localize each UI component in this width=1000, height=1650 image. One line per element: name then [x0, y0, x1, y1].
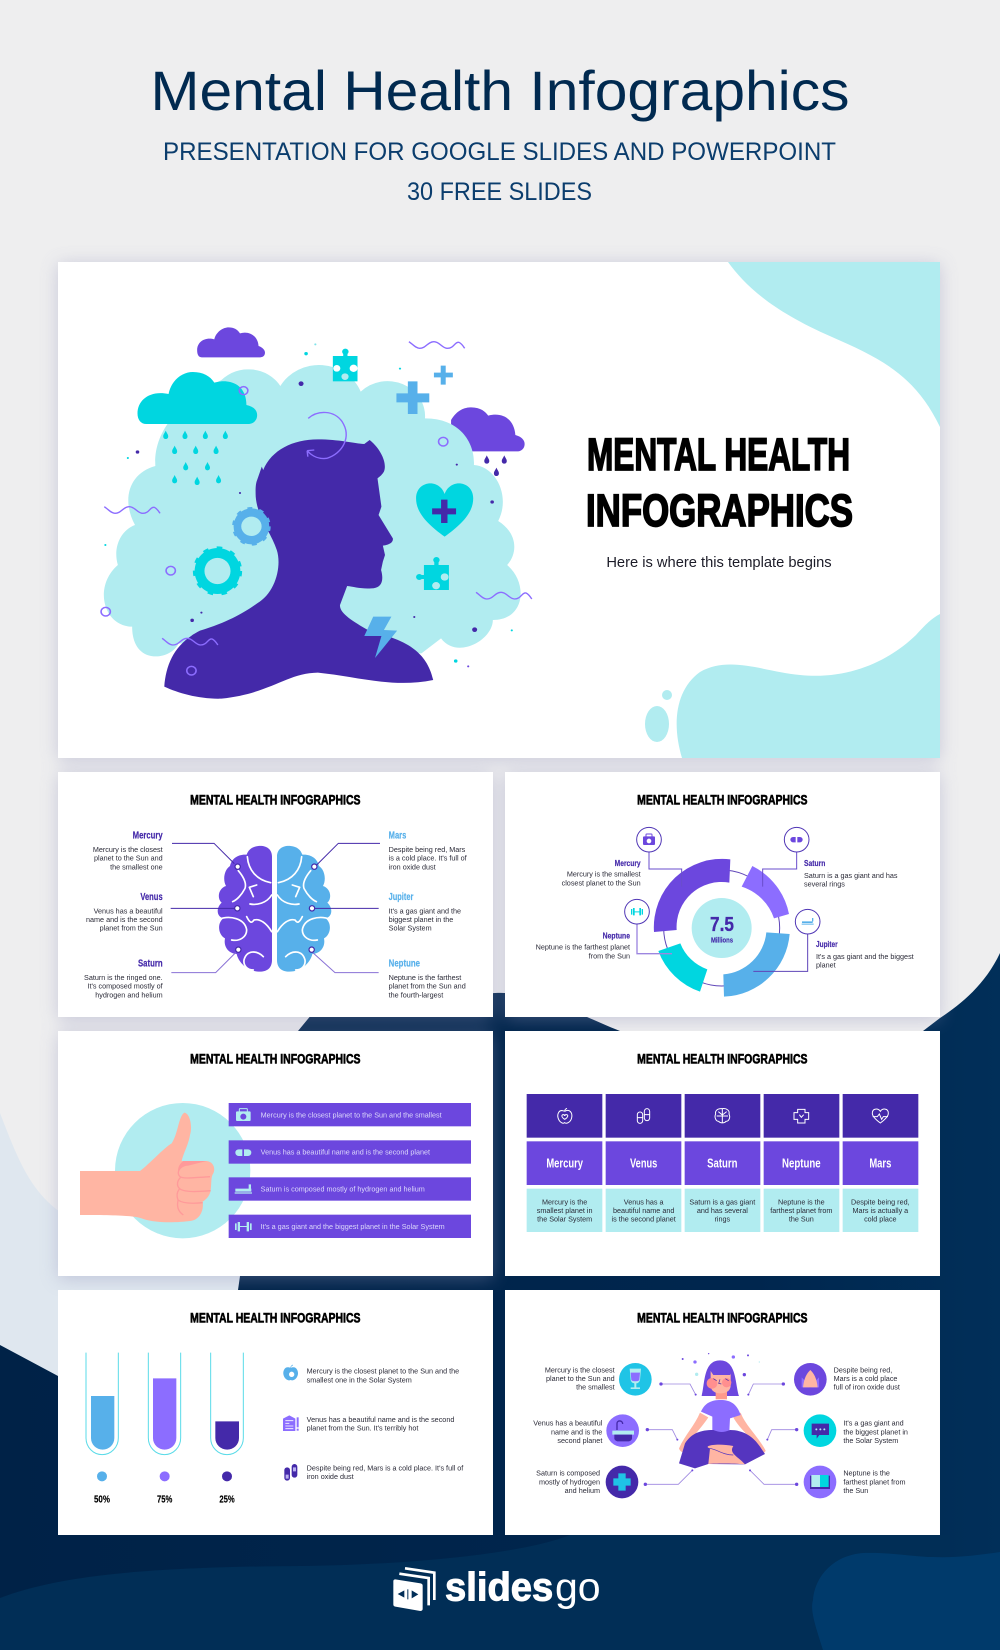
descriptions: Neptune is the — [778, 1197, 825, 1206]
bar 2 — [229, 1140, 471, 1164]
descriptions: Venus has a — [624, 1197, 665, 1206]
text: neptune — [536, 931, 630, 960]
text 1 — [307, 1367, 459, 1384]
descriptions: smallest planet in — [537, 1206, 593, 1215]
cover title — [586, 429, 853, 536]
text: mars — [389, 831, 468, 871]
text: neptune: planet from the Sun and — [389, 982, 466, 991]
dots dark — [136, 381, 494, 667]
text: bathtub: Venus has a beautiful — [533, 1419, 603, 1428]
centre value — [692, 898, 752, 958]
panel: thumbs up slide — [58, 1031, 493, 1276]
text: jupiter: Jupiter — [389, 892, 414, 903]
text: venus — [86, 892, 163, 933]
logo: slidesgo — [393, 1566, 601, 1611]
corner blob top right — [728, 262, 940, 427]
text: neptune: Neptune — [603, 931, 630, 941]
percent labels: 75% — [157, 1494, 173, 1505]
text: saturn: It's composed mostly of — [87, 982, 164, 991]
descriptions: the Sun — [789, 1215, 814, 1224]
text 2: Venus has a beautiful name and is the second — [307, 1415, 454, 1424]
text: glass: Mercury is the closest — [545, 1365, 615, 1374]
bar 3 — [229, 1177, 471, 1201]
text: bubble: the biggest planet in — [843, 1427, 908, 1436]
text: bubble: the Solar System — [843, 1436, 898, 1445]
donut chart — [654, 859, 790, 997]
icon: small plus — [434, 366, 453, 385]
subtitle line 2: 30 FREE SLIDES — [407, 178, 592, 206]
person silhouette — [164, 439, 433, 699]
connectors — [645, 1384, 797, 1484]
text: saturn: hydrogen and helium — [95, 990, 163, 999]
text: mercury: the smallest one — [110, 862, 163, 871]
icon: dumbbell — [235, 1222, 252, 1231]
raindrops — [163, 431, 228, 485]
icon: bathtub — [606, 1414, 639, 1447]
text: plus — [536, 1469, 600, 1495]
icon: apple — [283, 1365, 298, 1380]
text: neptune — [389, 959, 466, 999]
icon: pill — [784, 827, 809, 852]
icon: card deck — [393, 1568, 434, 1611]
text: mars: is a cold place. It's full of — [389, 854, 468, 863]
raindrops right — [484, 455, 507, 476]
bar 4 — [229, 1215, 471, 1238]
icon: bed — [795, 909, 820, 934]
text: plus: and helium — [565, 1486, 600, 1495]
connector dots — [235, 864, 317, 952]
text 3 — [307, 1463, 464, 1481]
text: neptune: Neptune — [389, 959, 421, 970]
corner blob bottom right — [677, 614, 940, 758]
text: mars: Despite being red, Mars — [389, 845, 466, 854]
icon: praying hands — [794, 1363, 827, 1396]
text: glass — [545, 1365, 615, 1392]
icon: teal gear — [194, 547, 241, 595]
descriptions: cold place — [864, 1215, 897, 1224]
descriptions: is the second planet — [612, 1215, 676, 1224]
text: bathtub — [533, 1419, 603, 1445]
text: mercury — [93, 831, 163, 871]
icon: bed — [235, 1184, 252, 1194]
heading: MENTAL HEALTH INFOGRAPHICS — [637, 1052, 807, 1067]
percent labels: 50% — [94, 1494, 110, 1505]
heading: MENTAL HEALTH INFOGRAPHICS — [637, 1311, 807, 1326]
text: hands: Mars is a cold place — [834, 1374, 897, 1383]
brain — [218, 846, 331, 972]
panel: brain slide — [58, 772, 493, 1017]
percent labels — [94, 1494, 235, 1505]
rings — [101, 387, 448, 675]
icon: heart — [416, 483, 473, 537]
text: glass: planet to the Sun and — [546, 1374, 615, 1383]
blob dot — [662, 690, 672, 700]
text: bubble — [843, 1419, 908, 1445]
text: jupiter — [816, 939, 914, 970]
heading: MENTAL HEALTH INFOGRAPHICS — [190, 1311, 360, 1326]
names: Venus — [630, 1156, 657, 1170]
descriptions: beautiful name and — [613, 1206, 674, 1215]
descriptions: Despite being red, — [851, 1197, 910, 1206]
text: jupiter: Solar System — [389, 924, 432, 933]
text 1: Mercury is the closest planet to the Sun and the — [307, 1367, 459, 1376]
text: book: the Sun — [843, 1486, 868, 1495]
icon: big plus — [396, 381, 429, 414]
circle backdrop — [115, 1103, 250, 1238]
text: venus: Venus — [140, 892, 163, 903]
text: mercury: planet to the Sun and — [94, 854, 163, 863]
text: saturn — [804, 858, 898, 889]
bar 1: Mercury is the closest planet to the Sun and the smallest — [261, 1110, 442, 1119]
names — [546, 1156, 891, 1170]
heading: MENTAL HEALTH INFOGRAPHICS — [190, 1052, 360, 1067]
legend dots — [97, 1471, 232, 1481]
icon: dumbbell — [625, 899, 649, 924]
text: venus: name and is the second — [86, 915, 163, 924]
tube 25% — [211, 1353, 243, 1455]
descriptions — [537, 1197, 910, 1224]
text 1: smallest one in the Solar System — [307, 1375, 412, 1384]
icon: circular arrow — [307, 412, 346, 459]
text: jupiter: Jupiter — [816, 939, 838, 949]
cover title: MENTAL HEALTH — [587, 429, 850, 480]
descriptions: the Solar System — [537, 1215, 592, 1224]
text: saturn: Saturn is the ringed one. — [84, 973, 163, 982]
tube 50% — [86, 1353, 118, 1455]
descriptions: and has several — [697, 1206, 748, 1215]
bar 3: Saturn is composed mostly of hydrogen and helium — [261, 1185, 425, 1194]
text: plus: Saturn is composed — [536, 1469, 600, 1478]
cover subtitle: Here is where this template begins — [606, 555, 832, 571]
text: saturn: Saturn — [804, 858, 825, 868]
subtitle: PRESENTATION FOR GOOGLE SLIDES AND POWERPOINT — [163, 138, 836, 166]
descriptions: Mars is actually a — [852, 1206, 909, 1215]
cover title: INFOGRAPHICS — [586, 485, 853, 536]
text: mercury — [562, 858, 641, 887]
text: venus: planet from the Sun — [100, 924, 163, 933]
icon: teal rain cloud — [137, 372, 257, 424]
panel: meditation slide — [505, 1290, 940, 1535]
text: mercury: Mercury is the closest — [93, 845, 163, 854]
connector lines — [637, 852, 808, 971]
icon: pills — [284, 1464, 297, 1481]
outline icons — [558, 1108, 888, 1123]
slide shadows — [58, 264, 940, 1279]
text: jupiter: It's a gas giant and the — [389, 906, 461, 915]
icon: plus — [606, 1466, 638, 1498]
text 3: Despite being red, Mars is a cold place. It's full of — [307, 1463, 464, 1472]
names row — [527, 1141, 918, 1185]
icon: medkit — [637, 827, 661, 852]
text: mercury: Mercury is the smallest — [567, 870, 641, 879]
icon: notes — [283, 1415, 299, 1431]
names: Saturn — [707, 1156, 737, 1170]
icon: glass — [619, 1363, 652, 1396]
centre value: 7.5 — [710, 913, 734, 936]
icon: purple cloud right — [451, 407, 525, 451]
hand — [80, 1113, 214, 1222]
panel: cover slide — [58, 262, 940, 758]
names: Mars — [869, 1156, 891, 1170]
descriptions: Mercury is the — [542, 1197, 587, 1206]
text: book: Neptune is the — [843, 1469, 890, 1478]
icon row — [527, 1094, 918, 1138]
text: mars: Mars — [389, 831, 406, 842]
descriptions: Saturn is a gas giant — [689, 1197, 755, 1206]
main title: Mental Health Infographics — [150, 59, 850, 122]
descriptions: farthest planet from — [770, 1206, 832, 1215]
icon: pill — [235, 1149, 251, 1156]
text: saturn: Saturn is a gas giant and has — [804, 871, 898, 880]
text: saturn — [84, 959, 164, 999]
description row — [527, 1189, 918, 1232]
text: neptune: the fourth-largest — [389, 990, 443, 999]
panel: donut slide — [505, 772, 940, 1017]
bar 4: It's a gas giant and the biggest planet in the Solar System — [261, 1222, 445, 1231]
icon: puzzle lower — [416, 557, 449, 590]
text: glass: the smallest — [576, 1383, 615, 1392]
descriptions: rings — [715, 1215, 731, 1224]
icon: puzzle top — [333, 349, 357, 381]
text: bubble: It's a gas giant and — [843, 1419, 904, 1428]
icon: speech bubble — [804, 1414, 836, 1447]
text: jupiter: It's a gas giant and the biggest — [816, 952, 914, 961]
bar 1 — [229, 1103, 471, 1126]
names: Neptune — [782, 1156, 821, 1170]
text: jupiter: biggest planet in the — [389, 915, 453, 924]
bar 2: Venus has a beautiful name and is the second planet — [261, 1148, 430, 1157]
text: mercury: Mercury — [615, 858, 641, 868]
text: mars: iron oxide dust — [389, 862, 436, 871]
text: neptune: from the Sun — [589, 951, 630, 960]
panel: table slide — [505, 1031, 940, 1276]
text 3: iron oxide dust — [307, 1472, 354, 1481]
text: hands: full of iron oxide dust — [834, 1383, 900, 1392]
icon: medkit — [236, 1109, 251, 1121]
icon: lightning bolt — [364, 617, 397, 658]
heading: MENTAL HEALTH INFOGRAPHICS — [637, 793, 807, 808]
blob ellipse — [645, 706, 669, 742]
squiggles — [104, 342, 532, 645]
text 2: planet from the Sun. It's terribly hot — [307, 1424, 418, 1433]
connector lines — [171, 843, 380, 973]
text: book — [843, 1469, 906, 1495]
names: Mercury — [546, 1156, 583, 1170]
icon: book — [804, 1466, 836, 1498]
text: mercury: closest planet to the Sun — [562, 878, 641, 887]
text 2 — [307, 1415, 454, 1433]
text: hands — [834, 1365, 900, 1392]
text: bathtub: name and is the — [551, 1427, 602, 1436]
text: neptune: Neptune is the farthest — [389, 973, 461, 982]
percent labels: 25% — [219, 1494, 235, 1505]
icon: purple cloud top — [197, 327, 265, 357]
thought blob — [104, 365, 521, 656]
tube 75% — [148, 1353, 181, 1455]
text: venus: Venus has a beautiful — [94, 906, 163, 915]
text: jupiter — [389, 892, 461, 933]
text: plus: mostly of hydrogen — [539, 1477, 600, 1486]
meditating woman — [679, 1360, 766, 1468]
floating dots — [682, 1353, 760, 1376]
text: saturn: Saturn — [138, 959, 163, 970]
text: bathtub: second planet — [557, 1436, 602, 1445]
text: jupiter: planet — [816, 961, 836, 970]
text: mercury: Mercury — [133, 831, 163, 842]
panel: test tubes slide — [58, 1290, 493, 1535]
icon: blue gear — [233, 508, 270, 545]
connector dots — [644, 1382, 798, 1486]
text: book: farthest planet from — [843, 1477, 906, 1486]
text: neptune: Neptune is the farthest planet — [536, 943, 630, 952]
centre value: Millions — [711, 938, 733, 945]
illustration: head with clouds — [101, 327, 532, 699]
text: saturn: several rings — [804, 880, 845, 889]
dots teal — [104, 343, 513, 663]
heading: MENTAL HEALTH INFOGRAPHICS — [190, 793, 360, 808]
text: hands: Despite being red, — [834, 1365, 892, 1374]
wordmark: go — [555, 1566, 601, 1610]
wordmark: slides — [445, 1566, 553, 1610]
